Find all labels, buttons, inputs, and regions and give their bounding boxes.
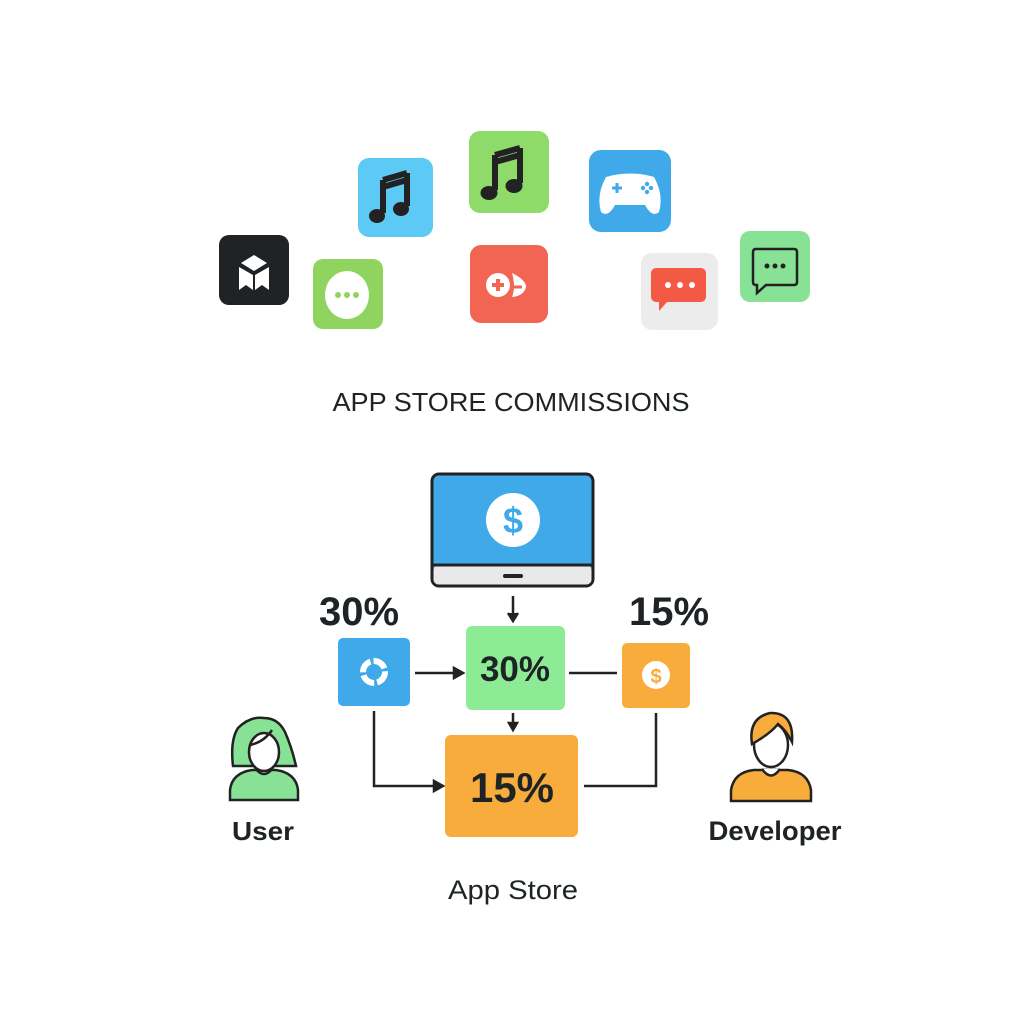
- icon: red game app: [470, 245, 548, 323]
- icon: green music app: [469, 131, 549, 213]
- label: 15%: 15%: [629, 590, 709, 634]
- label: 30%: 30%: [319, 590, 399, 634]
- icon: monitor with dollar: $: [503, 500, 523, 541]
- box: blue refresh: [338, 638, 410, 706]
- icon: developer: [731, 713, 811, 801]
- label: app store: App Store: [448, 875, 578, 905]
- box: green 30%: [466, 626, 565, 710]
- box: green 30%: 30%: [480, 650, 550, 689]
- arrows and connectors: [374, 596, 656, 791]
- icon: green outline chat app: [740, 231, 810, 302]
- icon: dark box app: [219, 235, 289, 305]
- title: APP STORE COMMISSIONS: [332, 387, 690, 417]
- icon: blue music app: [358, 158, 433, 237]
- box: app store 15%: [445, 735, 578, 837]
- label: developer: Developer: [708, 816, 842, 846]
- label: user: User: [232, 816, 294, 846]
- icon: user: [230, 718, 298, 800]
- box: orange dollar: $: [650, 666, 662, 688]
- box: orange dollar: [622, 643, 690, 708]
- icon: green chat bubble app: [313, 259, 383, 329]
- icon: gray chat app: [641, 253, 718, 330]
- icon: monitor with dollar: [432, 474, 593, 586]
- icon: blue gamepad app: [589, 150, 671, 232]
- box: app store 15%: 15%: [470, 764, 554, 811]
